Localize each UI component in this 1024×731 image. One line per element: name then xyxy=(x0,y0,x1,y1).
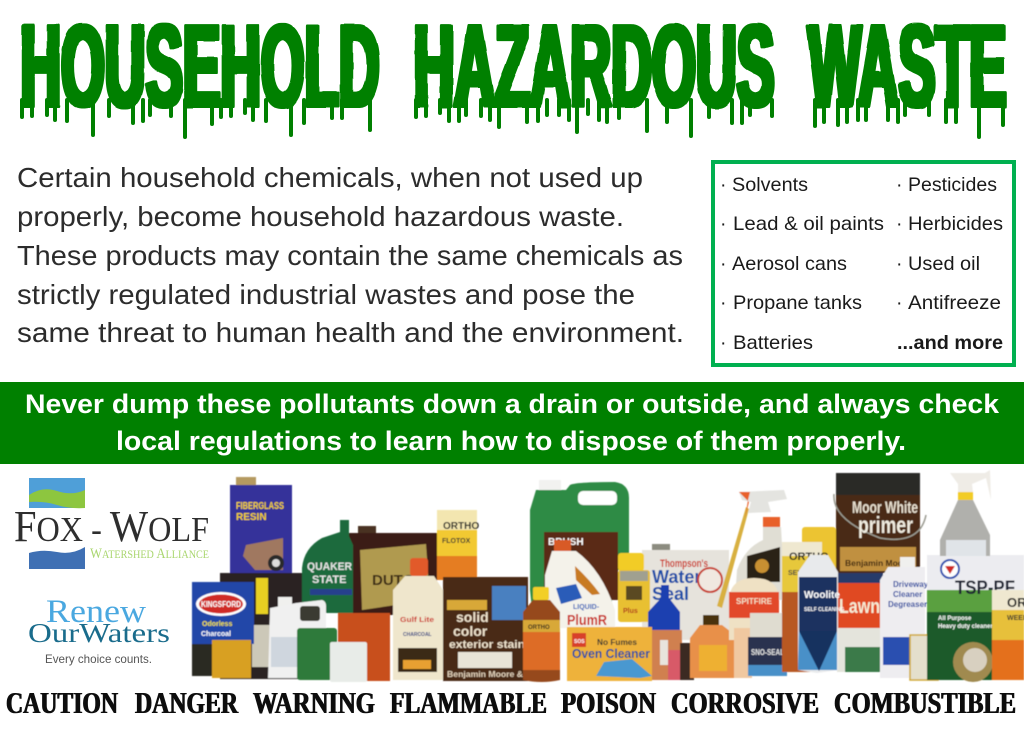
bottle: Gulf Lite charcoal starter: Gulf Lite xyxy=(400,617,434,624)
yellow can behind xyxy=(802,527,836,577)
panel: list of hazardous products: · xyxy=(720,174,726,196)
can: Thompson's Water Seal: Water xyxy=(652,567,701,587)
footer hazard words: POISON xyxy=(561,685,656,720)
can: Spitfire: SPITFIRE xyxy=(736,597,773,606)
box: Kingsford charcoal lighter: Odorless xyxy=(202,621,232,628)
footer hazard words: FLAMMABLE xyxy=(390,685,547,720)
can: yellow aerosol xyxy=(618,553,650,622)
yellow stick xyxy=(717,507,749,608)
panel: list of hazardous products: · xyxy=(896,292,902,314)
can: Moor White primer: Moor White xyxy=(852,498,918,517)
panel: list of hazardous products: · xyxy=(720,332,726,354)
can: Fiberglass Resin: RESIN xyxy=(236,512,267,523)
can: Spitfire xyxy=(729,578,779,678)
jug: large green container: BRUSH xyxy=(548,537,584,548)
can: Ortho Flotox: ORTHO xyxy=(443,521,479,532)
logo: Renew Our Waters: Every choice counts. xyxy=(45,652,152,666)
can: solid color exterior stain: Benjamin Moore & xyxy=(447,670,523,679)
can: orange paint xyxy=(338,613,390,681)
dark box behind xyxy=(220,573,304,679)
panel: list of hazardous products: Herbicides xyxy=(908,213,1003,235)
jug: Liquid-Plumr: LIQUID- xyxy=(573,604,600,611)
footer hazard words: DANGER xyxy=(135,685,238,720)
title: Household Hazardous Waste with slime drips: HOUSEHOLD xyxy=(20,1,380,131)
can: Ortho Sevin: SEVIN xyxy=(788,570,809,577)
can: Moor White primer: Benjamin Moore xyxy=(845,559,912,568)
bottle: blue xyxy=(648,585,680,642)
can: Thompson's Water Seal: Thompson's xyxy=(660,558,708,570)
panel: list of hazardous products: Propane tanks xyxy=(733,292,862,314)
can: Woolite xyxy=(798,555,844,673)
box: SOS oven cleaner: Oven Cleaner xyxy=(572,646,650,661)
can: Thompson's Water Seal: Seal xyxy=(652,584,689,604)
can: Woolite: SELF CLEANING xyxy=(804,607,844,613)
can: Moor White primer xyxy=(834,473,926,573)
small white can xyxy=(330,642,367,682)
can: Ortho weed killer xyxy=(992,590,1024,680)
can: Ortho Flotox xyxy=(437,510,479,580)
logo: Renew Our Waters: OurWaters xyxy=(28,618,170,648)
intro paragraph: Certain household chemicals, when not used up xyxy=(17,162,643,193)
can: Ortho Sevin xyxy=(782,542,829,672)
footer hazard words: WARNING xyxy=(253,685,375,720)
can: Thompson's Water Seal xyxy=(642,544,729,640)
can: old rusty can: DUTCH xyxy=(372,572,424,589)
bottle: Driveway Cleaner: Degreaser xyxy=(888,600,927,609)
bottle: Gulf Lite charcoal starter: CHARCOAL xyxy=(403,632,432,638)
bottle: Gulf Lite charcoal starter xyxy=(393,558,443,680)
panel: list of hazardous products: · xyxy=(896,253,902,275)
logo: Fox-Wolf Watershed Alliance: WATERSHED ALLIANCE xyxy=(90,546,209,562)
green cylinder xyxy=(297,628,337,680)
round gauge xyxy=(953,642,993,682)
banner: disposal warning: Never dump these pollutants down a drain or outside, and always check xyxy=(25,389,999,419)
can: Sno-Seal: SNO-SEAL xyxy=(751,648,784,657)
intro paragraph: These products may contain the same chemicals as xyxy=(17,240,683,271)
can: solid color exterior stain: solid xyxy=(456,609,489,625)
panel: list of hazardous products: Antifreeze xyxy=(908,292,1001,314)
can: yellow aerosol: Plus xyxy=(623,608,638,615)
can: Moor White primer: primer xyxy=(858,512,913,538)
logo: Fox-Wolf Watershed Alliance xyxy=(14,478,209,569)
bottle: Driveway Cleaner xyxy=(880,557,929,678)
box: SOS oven cleaner xyxy=(567,627,652,681)
jug: Liquid-Plumr: PlumR xyxy=(567,612,607,629)
banner: disposal warning: local regulations to learn how to dispose of them properly. xyxy=(116,426,906,456)
panel: list of hazardous products: Solvents xyxy=(732,174,808,196)
panel: list of hazardous products: · xyxy=(896,174,902,196)
footer hazard words: CORROSIVE xyxy=(671,685,819,720)
can: solid color exterior stain: exterior stain xyxy=(449,639,525,651)
can: solid color exterior stain: color xyxy=(453,623,488,639)
can: Woolite: Woolite xyxy=(804,590,840,601)
bottle: Quaker State: STATE xyxy=(312,574,346,586)
can: Ortho Flotox: FLOTOX xyxy=(442,538,471,545)
logo: Renew Our Waters: Renew xyxy=(46,594,146,630)
box: Kingsford charcoal lighter: KINGSFORD xyxy=(201,600,241,609)
bottle: Driveway Cleaner: Driveway xyxy=(893,580,929,589)
bottle: spray cleaner xyxy=(735,490,787,600)
jug: orange liquid xyxy=(690,615,735,678)
bottle: Quaker State xyxy=(302,520,353,613)
intro paragraph: strictly regulated industrial wastes and pose the xyxy=(17,279,635,310)
box: Lawn weed killer xyxy=(837,573,883,672)
can: Sno-Seal xyxy=(748,613,787,676)
intro paragraph: properly, become household hazardous waste. xyxy=(17,201,624,232)
intro paragraph: same threat to human health and the environment. xyxy=(17,317,684,348)
panel: list of hazardous products: · xyxy=(720,292,726,314)
can: Fiberglass Resin: FIBERGLASS xyxy=(236,501,284,512)
can: old rusty can xyxy=(340,526,437,615)
box: SOS oven cleaner: SOS xyxy=(574,639,585,645)
small yellow can xyxy=(212,640,251,678)
panel: list of hazardous products: · xyxy=(720,213,726,235)
small label card xyxy=(910,635,938,680)
panel: list of hazardous products: Aerosol cans xyxy=(732,253,847,275)
can: solid color exterior stain xyxy=(443,577,528,681)
panel: list of hazardous products: · xyxy=(896,213,902,235)
can: TSP-PF all purpose cleaner: All Purpose xyxy=(938,616,972,622)
can: TSP-PF all purpose cleaner: Heavy duty cleaner xyxy=(938,624,993,630)
jug: Liquid-Plumr xyxy=(545,540,615,629)
bottle: Ortho liquid xyxy=(523,587,560,682)
jug: white bottle xyxy=(268,597,326,678)
logo: Renew Our Waters xyxy=(28,594,170,666)
can: TSP-PF all purpose cleaner xyxy=(927,555,1024,680)
box: SOS oven cleaner: No Fumes xyxy=(597,638,638,647)
can: Ortho Sevin: ORTHO xyxy=(789,551,829,563)
can: TSP-PF all purpose cleaner: TSP-PF xyxy=(955,578,1015,599)
bottle: Ortho liquid: ORTHO xyxy=(528,625,550,631)
footer hazard words: CAUTION xyxy=(6,685,118,720)
bottle: Quaker State: QUAKER xyxy=(307,561,352,573)
photo: collection of household chemical containers xyxy=(192,470,1024,682)
panel: list of hazardous products xyxy=(713,162,1014,365)
panel: list of hazardous products: ...and more xyxy=(897,332,1003,354)
panel: list of hazardous products: Lead & oil paints xyxy=(733,213,884,235)
bottle: Driveway Cleaner: Cleaner xyxy=(893,590,922,599)
logo: Fox-Wolf Watershed Alliance: FOX - WOLF xyxy=(14,502,209,551)
intro paragraph xyxy=(17,162,684,348)
panel: list of hazardous products: Pesticides xyxy=(908,174,997,196)
box: Kingsford charcoal lighter xyxy=(192,582,254,676)
panel: list of hazardous products: · xyxy=(720,253,726,275)
box: Kingsford charcoal lighter: Charcoal xyxy=(201,631,231,638)
panel: list of hazardous products: Used oil xyxy=(908,253,980,275)
jug: large green container xyxy=(530,480,629,610)
banner: disposal warning xyxy=(0,382,1024,464)
box: Lawn weed killer: Lawn xyxy=(839,596,880,618)
can: Fiberglass Resin xyxy=(230,477,292,574)
small bottles group xyxy=(652,630,694,680)
footer hazard words xyxy=(6,685,1016,720)
bottle: spray cleaner, clear xyxy=(940,470,991,556)
panel: list of hazardous products: Batteries xyxy=(733,332,813,354)
